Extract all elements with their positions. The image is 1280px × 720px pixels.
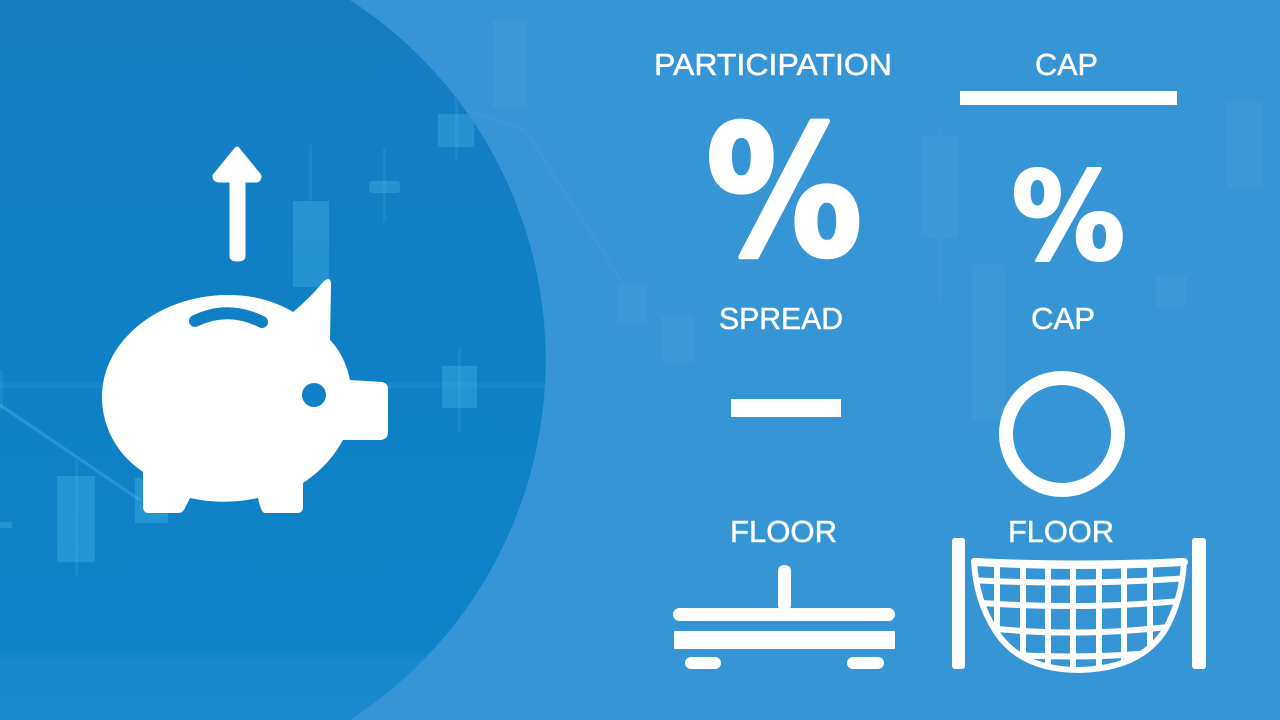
small percent sign: %	[1012, 146, 1125, 288]
icon: piggy bank	[102, 279, 388, 513]
label: spread: SPREAD	[719, 301, 843, 336]
icon: minus bar	[731, 399, 841, 417]
label: cap (middle): CAP	[1031, 301, 1095, 336]
large percent sign: %	[706, 88, 862, 297]
dark blue circle panel	[0, 0, 546, 720]
background candlesticks: right area	[465, 20, 1263, 420]
icon: safety net	[952, 538, 1206, 672]
label: cap (top): CAP	[1035, 47, 1098, 82]
piggy bank coin slot	[195, 313, 262, 322]
icon: floor platform	[673, 565, 895, 669]
label: floor (left): FLOOR	[730, 514, 837, 549]
icon: up arrow	[215, 149, 259, 259]
icon: circle ring	[1006, 378, 1118, 490]
label: participation: PARTICIPATION	[654, 47, 892, 82]
piggy bank eye	[302, 383, 326, 407]
label: floor (right): FLOOR	[1008, 514, 1114, 549]
background candlesticks: inside circle	[0, 97, 477, 576]
fraction bar	[960, 91, 1177, 105]
